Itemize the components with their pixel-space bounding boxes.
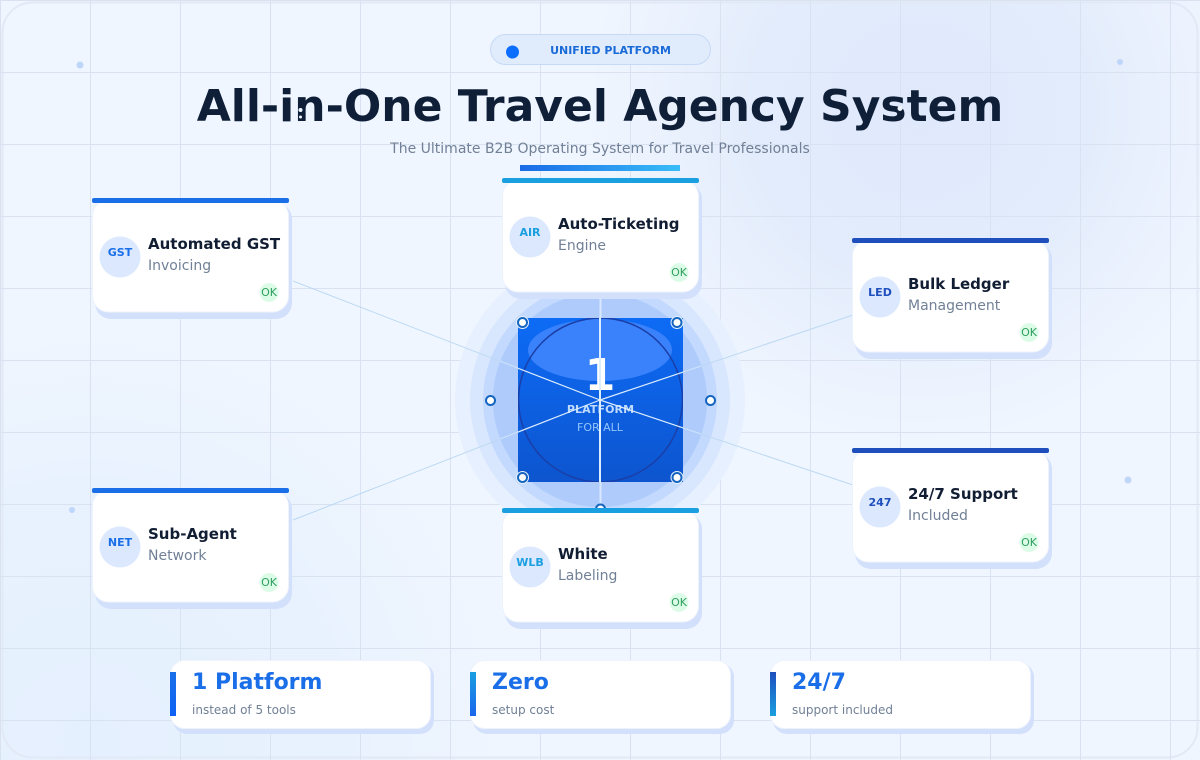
stat: 1 Platform: instead of 5 tools [192,703,296,717]
title: All-in-One Travel Agency System [197,81,1003,132]
decorative dots [69,59,1132,513]
card: White Labeling: WLB [516,556,544,569]
card: Bulk Ledger: Management [908,298,1001,314]
stat: 1 Platform: 1 Platform [192,670,322,695]
hub circle outline [518,318,682,482]
card: Sub-Agent: OK [261,576,278,589]
card: Bulk Ledger: LED [868,286,892,299]
stat: Zero: Zero [492,670,549,695]
subtitle: The Ultimate B2B Operating System for Travel Professionals [389,141,810,157]
stat: Zero: setup cost [492,703,555,717]
hub handle halos [516,316,684,484]
card: Auto-Ticketing: OK [671,266,688,279]
connector lines [293,281,853,520]
card: Sub-Agent: NET [108,536,133,549]
stat: 1 Platform [170,660,434,734]
card: Bulk Ledger [852,238,1052,359]
badge: unified platform [490,34,710,64]
hub label: PLATFORM [567,403,634,416]
central hub [292,280,852,520]
card: Sub-Agent [92,488,292,609]
card: Bulk Ledger: Bulk Ledger [908,275,1010,293]
hub sub label: FOR ALL [577,421,624,434]
hub square [518,318,683,482]
card: 24/7 Support: 247 [869,496,891,509]
badge: unified platform: UNIFIED PLATFORM [550,44,671,57]
card: Sub-Agent: Sub-Agent [148,525,237,543]
card: Bulk Ledger: OK [1021,326,1038,339]
card: White Labeling: White [558,545,608,563]
card: White Labeling: OK [671,596,688,609]
hub rings [455,255,745,545]
card: Automated GST: OK [261,286,278,299]
card: Auto-Ticketing: Engine [558,238,606,254]
card: Automated GST: Automated GST [148,235,281,253]
card: Automated GST: Invoicing [148,258,211,274]
card: Automated GST: GST [108,246,133,259]
stat: Zero [470,660,734,734]
card: Auto-Ticketing [502,178,702,299]
stat: 24/7: support included [792,703,893,717]
title underline [520,165,680,171]
card: White Labeling [502,508,702,629]
card: 24/7 Support: Included [908,508,968,524]
card: White Labeling: Labeling [558,568,617,584]
card: Auto-Ticketing: Auto-Ticketing [558,215,680,233]
card: 24/7 Support: OK [1021,536,1038,549]
hub faint spokes [500,290,701,510]
card: Auto-Ticketing: AIR [519,226,541,239]
card: Sub-Agent: Network [148,548,207,564]
card: 24/7 Support: 24/7 Support [908,485,1018,503]
stat: 24/7 [770,660,1034,734]
hub highlight [528,319,672,381]
card: Automated GST [92,198,292,319]
title sparkle dots [298,106,902,118]
card: 24/7 Support [852,448,1052,569]
hub number: 1 [585,350,615,401]
hub bright spokes [518,318,683,482]
stat: 24/7: 24/7 [792,670,846,695]
hub handles [486,318,715,514]
